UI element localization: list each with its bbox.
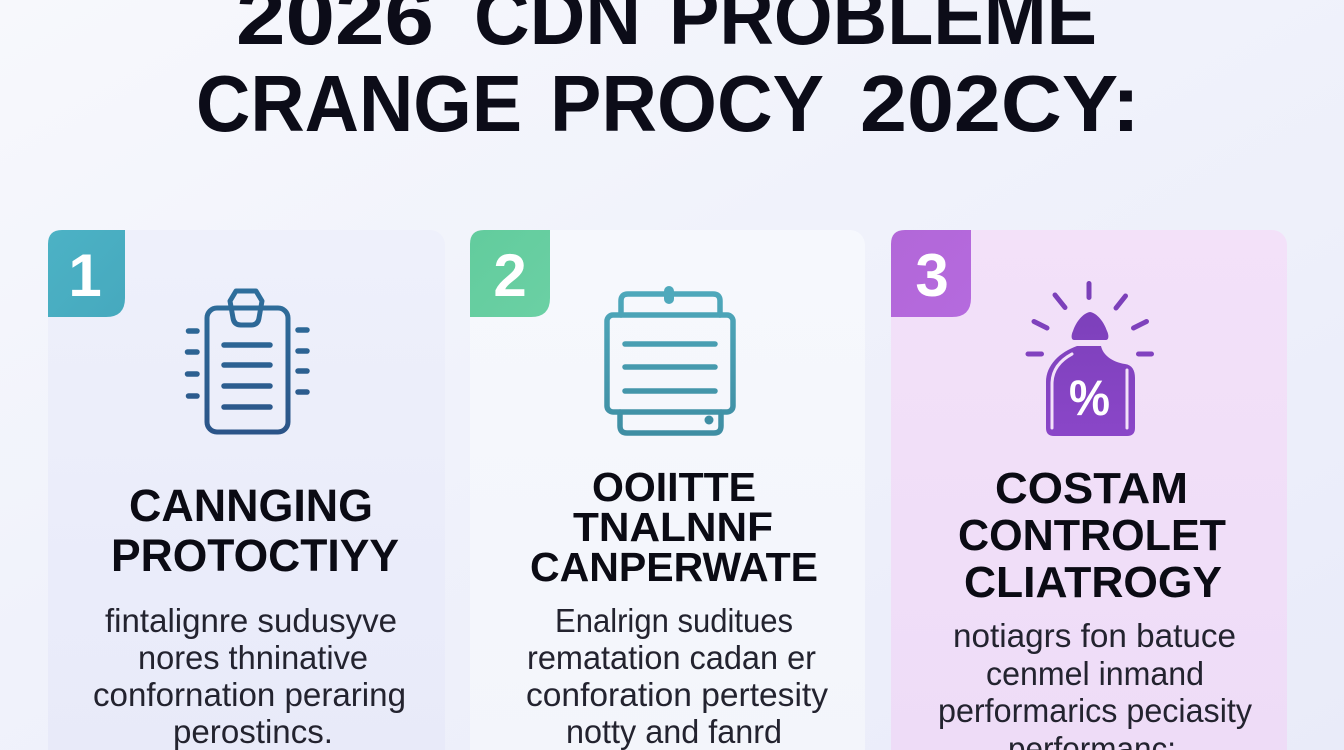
- card 2 heading: [530, 464, 818, 590]
- card 1 body text: confornation peraring: [93, 676, 406, 713]
- number badge 2: 2: [493, 242, 527, 309]
- card 3 background: [891, 230, 1287, 750]
- number badge 2: [470, 230, 550, 317]
- card 2 body text: notty and fanrd: [566, 713, 782, 750]
- number badge 1: 1: [68, 242, 102, 309]
- percent sign: %: [1069, 370, 1110, 426]
- card 1 body text: fintalignre sudusyve: [105, 602, 397, 639]
- card 3 body text: performarics peciasity: [938, 692, 1252, 729]
- card 2 body text: rematation cadan er: [527, 639, 816, 676]
- card 1 body text: [93, 602, 406, 750]
- card 1 heading: [111, 480, 399, 581]
- panel: card 3: [891, 230, 1287, 750]
- card 2 body text: Enalrign suditues: [555, 602, 793, 639]
- title: 202CY:: [860, 59, 1140, 148]
- card 2 heading: OOIITTE: [592, 464, 756, 510]
- number badge 3: [891, 230, 971, 317]
- card 3 heading: CONTROLET: [958, 511, 1226, 560]
- icon: clipboard: [188, 291, 307, 432]
- title: [196, 0, 1140, 148]
- card 3 heading: [958, 464, 1226, 607]
- title: CRANGE: [196, 59, 522, 148]
- bell dome: [1072, 312, 1108, 340]
- card 1 heading: CANNGING: [129, 480, 373, 531]
- card 2 body text: conforation pertesity: [526, 676, 828, 713]
- bell body: [1046, 346, 1135, 436]
- card 3 body text: [938, 617, 1252, 750]
- panel: card 1: [48, 230, 445, 750]
- card 2 background: [470, 230, 865, 750]
- icon: alarm bell with percent: [1028, 284, 1152, 436]
- alert rays: [1028, 284, 1152, 354]
- card 2 body text: [526, 602, 828, 750]
- card 1 heading: PROTOCTIYY: [111, 530, 399, 581]
- number badge 1: [48, 230, 125, 317]
- card 1 background: [48, 230, 445, 750]
- card 1 body text: perostincs.: [173, 713, 333, 750]
- card 3 heading: CLIATROGY: [964, 558, 1222, 607]
- card 3 body text: notiagrs fon batuce: [953, 617, 1236, 654]
- icon: document tray: [607, 286, 733, 433]
- panel: card 2: [470, 230, 865, 750]
- card 1 body text: nores thninative: [138, 639, 368, 676]
- number badge 3: 3: [915, 242, 949, 309]
- card 3 heading: COSTAM: [995, 464, 1188, 513]
- bell highlights: [1052, 354, 1127, 428]
- card 2 heading: CANPERWATE: [530, 544, 818, 590]
- card 2 heading: TNALNNF: [573, 504, 773, 550]
- title: PROCY: [550, 59, 824, 148]
- card 3 body text: cenmel inmand: [986, 655, 1204, 692]
